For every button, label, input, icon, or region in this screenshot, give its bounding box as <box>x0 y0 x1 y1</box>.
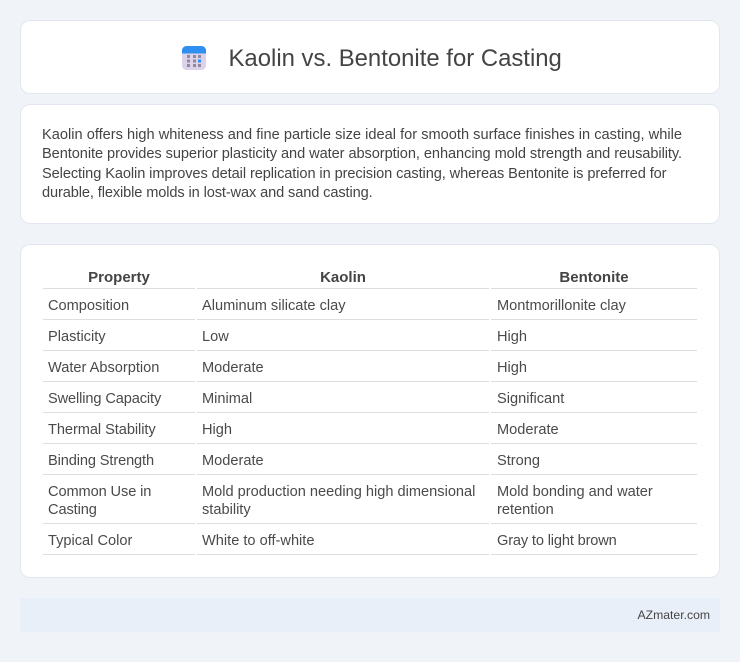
table: Moderate <box>497 422 559 438</box>
intro text: durable, flexible molds in lost-wax and sand casting. <box>42 185 373 201</box>
table: High <box>202 422 232 438</box>
intro text: Selecting Kaolin improves detail replication in precision casting, whereas Bentonite is preferred for <box>42 166 666 182</box>
table: Plasticity <box>48 329 106 345</box>
intro text <box>42 126 682 201</box>
table <box>43 269 697 555</box>
table: Gray to light brown <box>497 533 617 549</box>
icon: calendar <box>182 46 206 70</box>
table: Kaolin <box>320 269 366 286</box>
table: Moderate <box>202 453 264 469</box>
footer bar <box>20 598 720 632</box>
header panel <box>20 20 720 94</box>
table: Strong <box>497 453 540 469</box>
table: Thermal Stability <box>48 422 156 438</box>
table: Swelling Capacity <box>48 391 161 407</box>
table: Minimal <box>202 391 252 407</box>
table: Binding Strength <box>48 453 154 469</box>
intro panel <box>20 104 720 224</box>
intro text: Kaolin offers high whiteness and fine particle size ideal for smooth surface finishes in casting, while <box>42 126 682 142</box>
table: Aluminum silicate clay <box>202 298 346 314</box>
table: retention <box>497 502 554 518</box>
table: Common Use in <box>48 484 151 500</box>
table: High <box>497 360 527 376</box>
table: Significant <box>497 391 564 407</box>
table: White to off-white <box>202 533 314 549</box>
table: Casting <box>48 502 97 518</box>
table: Property <box>88 269 150 286</box>
table: Low <box>202 329 229 345</box>
table: Typical Color <box>48 533 132 549</box>
table: Mold production needing high dimensional <box>202 484 475 500</box>
table: Bentonite <box>559 269 629 286</box>
table: Mold bonding and water <box>497 484 653 500</box>
table: Water Absorption <box>48 360 159 376</box>
table: Montmorillonite clay <box>497 298 626 314</box>
table: High <box>497 329 527 345</box>
table: Moderate <box>202 360 264 376</box>
comparison table panel <box>20 244 720 578</box>
table: stability <box>202 502 251 518</box>
title: Kaolin vs. Bentonite for Casting <box>228 45 562 72</box>
table: Composition <box>48 298 129 314</box>
intro text: Bentonite provides superior plasticity and water absorption, enhancing mold strength and reusability. <box>42 146 682 162</box>
footer brand text: AZmater.com <box>638 608 710 622</box>
